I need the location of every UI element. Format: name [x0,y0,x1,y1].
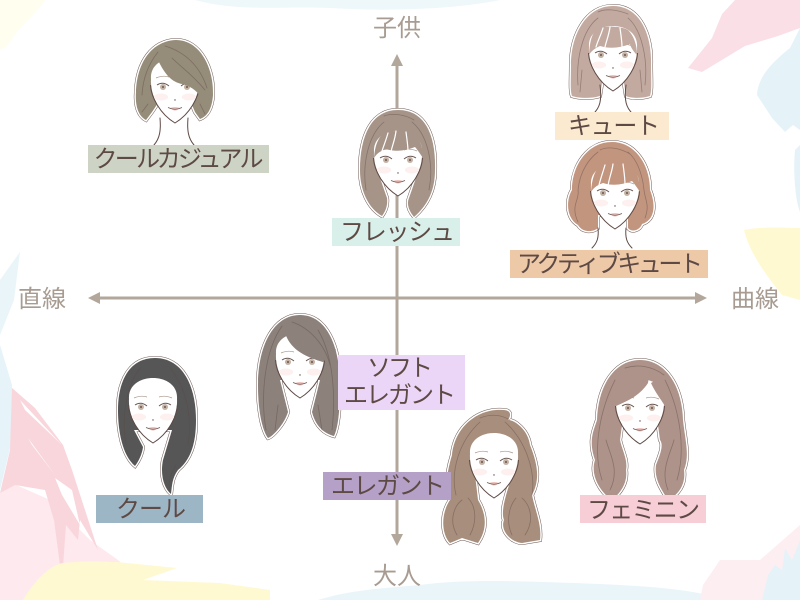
portrait: cute [571,6,651,114]
axis label: adult: 大人 [373,563,421,590]
axis label: straight: 直線 [18,286,66,313]
axis: vertical arrow [391,54,403,546]
portrait: soft elegant [258,315,340,438]
portrait: feminine [592,360,687,500]
label: active cute: アクティブキュート [517,251,703,278]
axis label: curve: 曲線 [731,286,779,313]
axis label: child: 子供 [373,15,421,42]
portrait: active cute [568,142,654,248]
label: feminine: フェミニン [587,497,700,524]
label: soft elegant: ソフト [367,355,433,382]
label: cool [96,495,203,523]
portrait: cool [118,358,196,494]
portrait: cool casual [136,40,213,145]
portrait: elegant [443,410,540,543]
label: cool casual: クールカジュアル [94,146,264,173]
portrait: fresh [360,110,435,217]
axis: horizontal arrow [88,292,707,304]
label: soft elegant: エレガント [344,382,456,409]
label: cool: クール [116,496,186,523]
label: cute: キュート [568,113,660,140]
label: elegant: エレガント [331,473,445,500]
label: soft elegant [338,355,465,410]
label: fresh: フレッシュ [340,219,455,246]
